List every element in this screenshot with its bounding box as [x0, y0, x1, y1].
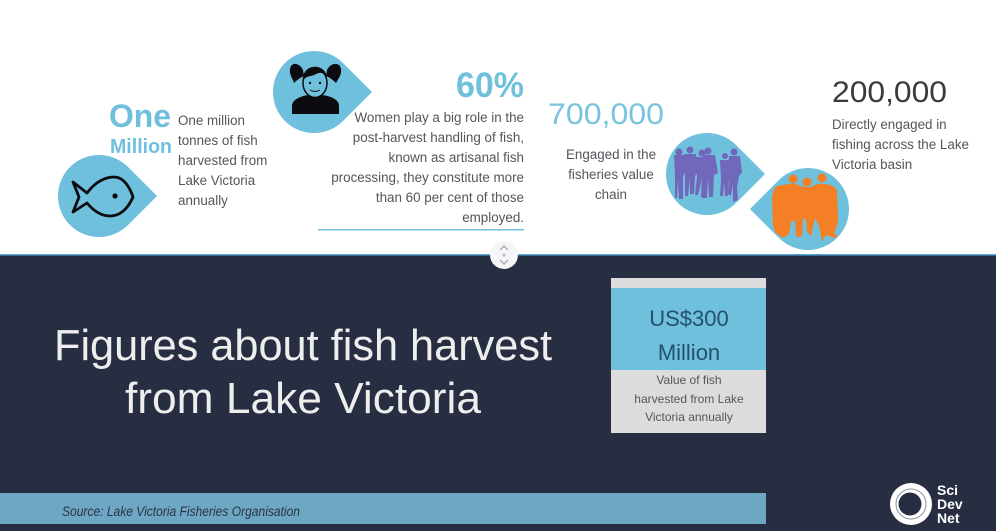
text: women description: than 60 per cent of those — [376, 190, 524, 205]
stat: 200,000: 200,000 — [832, 76, 947, 109]
text: women description: post-harvest handling of fish, — [353, 130, 524, 145]
stat: one million heading: One — [109, 98, 171, 134]
text: one million description: One million — [178, 113, 245, 128]
icon: purple people in teardrop — [666, 133, 765, 215]
icon: orange people in teardrop — [750, 168, 849, 250]
card: US$300 million: Value of fish — [656, 373, 722, 387]
text: one million description: harvested from — [178, 153, 267, 168]
text: value chain description: Engaged in the — [566, 147, 656, 162]
source bar — [0, 493, 766, 524]
text: women description: employed. — [462, 210, 524, 225]
text: women description — [331, 110, 524, 225]
text: women description: Women play a big role in the — [355, 110, 524, 125]
text: directly engaged description: fishing across the Lake — [832, 137, 969, 152]
stat: 60%: 60% — [456, 66, 524, 105]
card: US$300 million: US$300 — [649, 306, 729, 331]
logo: SciDevNet — [890, 482, 963, 526]
underline rule — [318, 229, 524, 230]
text: one million description — [178, 113, 267, 208]
text: value chain description: fisheries value — [568, 167, 654, 182]
logo: SciDevNet: Dev — [937, 496, 963, 512]
icon: fish in teardrop — [58, 155, 157, 237]
text: directly engaged description — [832, 117, 969, 172]
title — [54, 321, 552, 423]
title: Figures about fish harvest — [54, 321, 552, 370]
scroll control — [490, 241, 518, 269]
logo: SciDevNet: Sci — [937, 482, 958, 498]
stat: 700,000: 700,000 — [548, 98, 664, 131]
text: directly engaged description: Victoria basin — [832, 157, 912, 172]
text: one million description: Lake Victoria — [178, 173, 256, 188]
card: US$300 million: harvested from Lake — [634, 392, 744, 406]
logo: SciDevNet: Net — [937, 510, 960, 526]
stat: one million heading — [109, 98, 172, 158]
text: women description: known as artisanal fish — [389, 150, 524, 165]
icon: girl in teardrop — [273, 51, 372, 133]
text: value chain description — [566, 147, 656, 202]
text: women description: processing, they constitute more — [331, 170, 524, 185]
card: US$300 million: Million — [658, 340, 720, 365]
source bar: Source: Lake Victoria Fisheries Organisation — [62, 504, 300, 519]
text: value chain description: chain — [595, 187, 627, 202]
text: one million description: tonnes of fish — [178, 133, 258, 148]
card: US$300 million — [611, 278, 766, 433]
dark lower panel — [0, 254, 996, 531]
text: directly engaged description: Directly engaged in — [832, 117, 947, 132]
card: US$300 million: Victoria annually — [645, 410, 733, 424]
text: one million description: annually — [178, 193, 228, 208]
title: from Lake Victoria — [125, 374, 482, 423]
stat: one million heading: Million — [110, 136, 172, 158]
